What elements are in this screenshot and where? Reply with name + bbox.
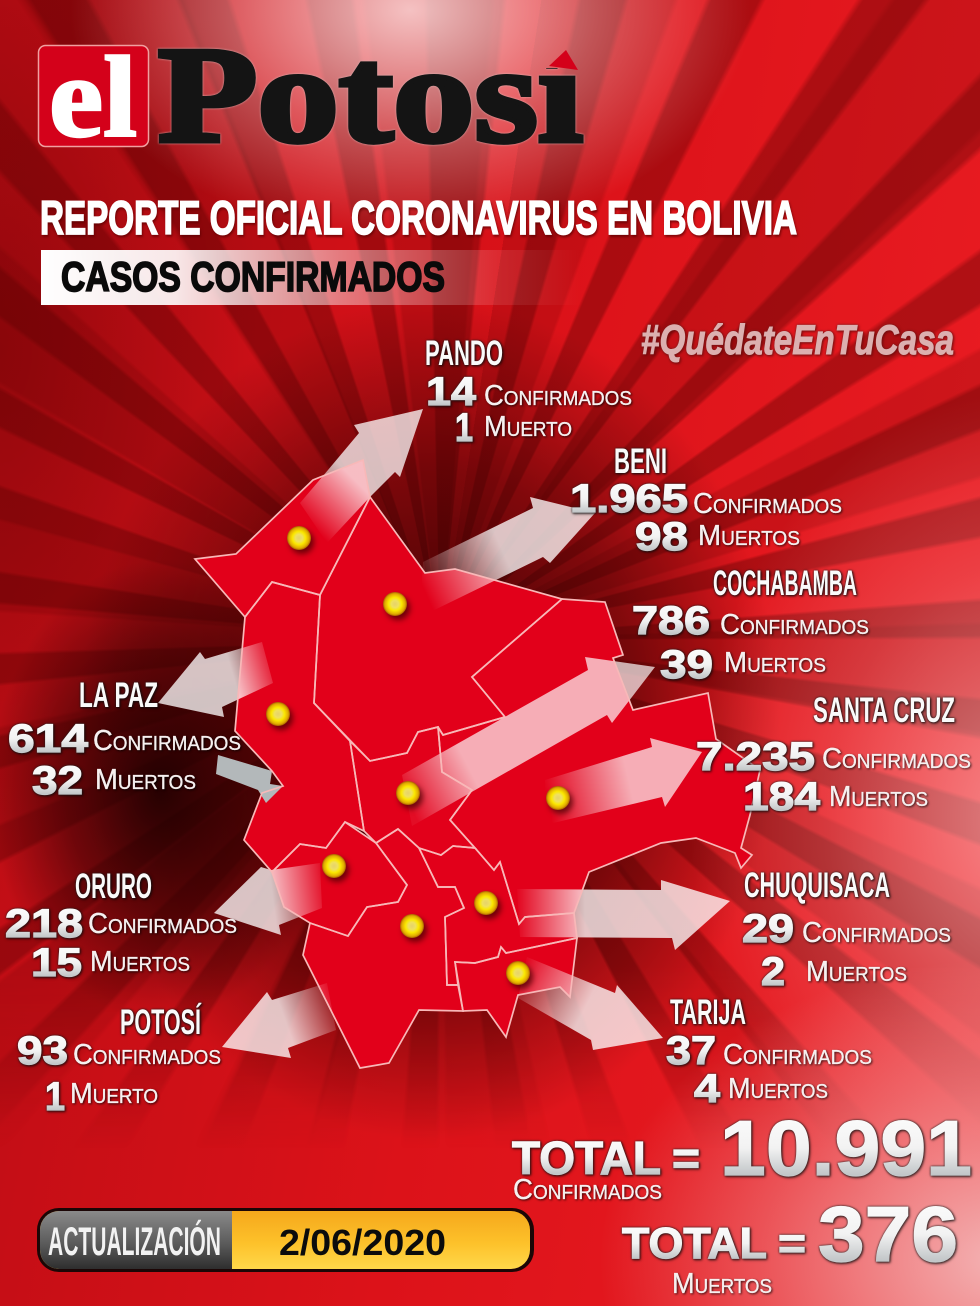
stats: Potosí: Confirmados — [73, 1039, 221, 1071]
total deaths: = — [778, 1219, 806, 1268]
update bar: ACTUALIZACIÓN — [48, 1218, 221, 1264]
total confirmed: = — [672, 1132, 700, 1184]
map region: Beni — [314, 497, 562, 761]
logo wordmark: Potosí: Potosí — [158, 19, 585, 171]
stats: La Paz — [8, 676, 241, 803]
stats: La Paz: LA PAZ — [79, 676, 158, 715]
arrow: La Paz — [158, 642, 273, 717]
stats: Santa Cruz — [696, 691, 971, 819]
map region: La Paz — [235, 582, 364, 872]
stats: Chuquisaca: CHUQUISACA — [744, 866, 890, 905]
stats: Beni: Muertos — [698, 520, 800, 552]
arrow: Oruro — [214, 863, 322, 935]
stats: Potosí — [17, 1002, 221, 1119]
stats: La Paz: 614 — [8, 717, 89, 761]
stats: Santa Cruz: 184 — [743, 775, 821, 819]
arrow: Pando — [300, 409, 423, 543]
marker: Chuquisaca — [474, 891, 498, 915]
total confirmed: Confirmados — [513, 1174, 662, 1206]
arrow: Beni — [420, 497, 595, 617]
stats: Chuquisaca: Muertos — [806, 956, 907, 988]
stats: Santa Cruz: Muertos — [829, 781, 928, 813]
stats: Oruro: 15 — [31, 941, 82, 985]
marker: Pando — [287, 526, 311, 550]
stats: Tarija — [666, 993, 872, 1111]
stats: Oruro: 218 — [5, 902, 83, 946]
marker: Beni — [383, 592, 407, 616]
subtitle band: casos confirmados: CASOS CONFIRMADOS — [61, 253, 445, 300]
stats: Pando: 14 — [426, 370, 477, 414]
stats: Cochabamba: COCHABAMBA — [713, 564, 857, 603]
stats: Pando: PANDO — [425, 334, 503, 373]
stats: La Paz: Muertos — [95, 764, 196, 796]
stats: Cochabamba: Confirmados — [720, 609, 869, 641]
stats: Pando: Confirmados — [484, 380, 632, 412]
stats: Beni: Confirmados — [693, 488, 842, 520]
stats: Oruro: Confirmados — [88, 908, 237, 940]
Lake Titicaca — [216, 755, 283, 803]
map region: Santa Cruz — [438, 599, 760, 924]
map of Bolivia — [158, 409, 760, 1068]
logo box: el: el — [49, 34, 137, 162]
total deaths: Muertos — [672, 1268, 772, 1300]
stats: Pando — [425, 334, 632, 450]
total confirmed — [512, 1104, 972, 1206]
stats: Beni: 98 — [635, 515, 688, 559]
stats: La Paz: 32 — [32, 759, 83, 803]
marker: Tarija — [506, 961, 530, 985]
map region: Chuquisaca — [419, 846, 577, 985]
stats: Tarija: Confirmados — [723, 1039, 872, 1071]
stats: Chuquisaca: Confirmados — [802, 917, 951, 949]
arrow: Santa Cruz — [545, 738, 702, 825]
marker: Oruro — [322, 854, 346, 878]
stats: Tarija: 37 — [666, 1029, 716, 1073]
stats: Oruro: ORURO — [75, 867, 152, 906]
arrow: Potosí — [222, 983, 336, 1058]
stats: Santa Cruz: Confirmados — [822, 743, 971, 775]
stats: Cochabamba: 786 — [632, 599, 710, 643]
total confirmed: 10.991 — [720, 1104, 972, 1192]
map region: Tarija — [455, 938, 577, 1037]
logo: el Potosí — [38, 44, 585, 148]
marker: Santa Cruz — [546, 786, 570, 810]
update bar: 2/06/2020 — [279, 1222, 446, 1263]
stats: Potosí: 1 — [45, 1075, 65, 1119]
stats: Potosí: 93 — [17, 1029, 68, 1073]
stats: La Paz: Confirmados — [93, 725, 241, 757]
stats: Tarija: TARIJA — [670, 993, 746, 1032]
stats: Tarija: 4 — [694, 1067, 721, 1111]
update bar — [37, 1208, 534, 1272]
stats: Beni: BENI — [614, 442, 667, 481]
marker: Cochabamba — [396, 781, 420, 805]
stats: Oruro — [5, 867, 237, 985]
stats: Potosí: POTOSÍ — [120, 1002, 202, 1042]
stats: Oruro: Muertos — [90, 946, 190, 978]
map region: Oruro — [272, 822, 407, 936]
stats: Cochabamba — [632, 564, 869, 687]
stats: Tarija: Muertos — [728, 1073, 828, 1105]
total deaths — [622, 1190, 958, 1300]
map region: Cochabamba — [350, 727, 475, 855]
total deaths: TOTAL — [622, 1219, 767, 1268]
arrow: Tarija — [518, 957, 663, 1050]
stats: Chuquisaca: 2 — [761, 950, 785, 994]
stats: Cochabamba: Muertos — [724, 647, 826, 679]
map region: Pando — [195, 460, 370, 617]
marker: Potosí — [400, 914, 424, 938]
arrow: Chuquisaca — [517, 880, 730, 950]
total deaths: 376 — [818, 1190, 958, 1278]
map region: Potosí — [303, 829, 464, 1068]
stats: Chuquisaca: 29 — [742, 907, 794, 951]
stats: Beni: 1.965 — [570, 477, 688, 521]
stats: Santa Cruz: 7.235 — [696, 735, 815, 779]
stats: Cochabamba: 39 — [660, 643, 713, 687]
stats: Chuquisaca — [742, 866, 951, 994]
map markers — [266, 526, 570, 985]
total confirmed: TOTAL — [512, 1132, 661, 1184]
stats: Potosí: Muerto — [70, 1078, 158, 1110]
stats: Beni — [570, 442, 842, 559]
stats: Pando: Muerto — [484, 411, 572, 443]
marker: La Paz — [266, 702, 290, 726]
arrow: Cochabamba — [402, 657, 655, 826]
logo accent: red triangle — [549, 50, 578, 70]
stats: Pando: 1 — [455, 406, 473, 450]
